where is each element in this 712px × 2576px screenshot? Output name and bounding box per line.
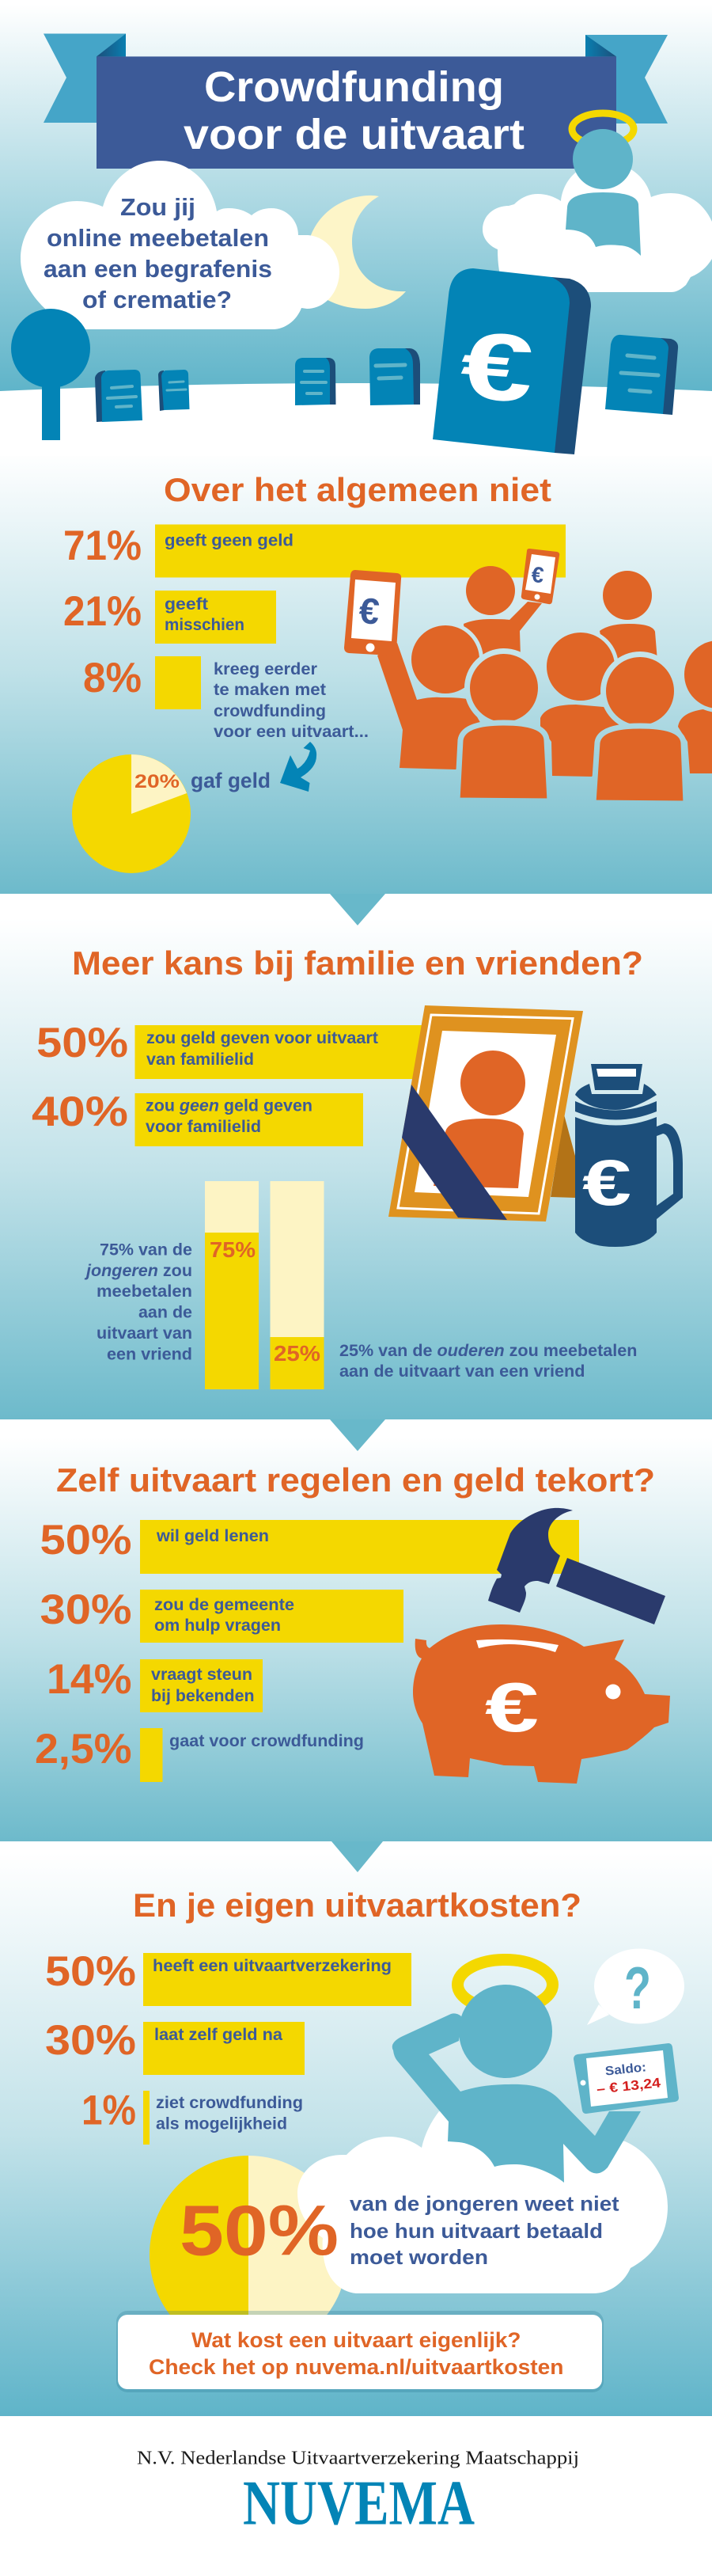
bar 50%: van familielid <box>146 1051 254 1069</box>
question text <box>44 193 272 313</box>
bar 21%: 21% <box>63 588 142 635</box>
bar 8%: voor een uitvaart... <box>214 723 369 741</box>
question text: online meebetalen <box>47 224 269 252</box>
back person right <box>600 571 657 661</box>
speech bubble <box>587 1949 684 2025</box>
text: ouderen <box>339 1342 638 1381</box>
panel: familie en vrienden <box>0 894 712 1419</box>
pointer triangle <box>331 1841 383 1872</box>
small tombstone 5 <box>605 335 678 415</box>
stacked bar: jongeren <box>205 1181 259 1389</box>
text: jongeren: jongeren zou <box>84 1262 192 1280</box>
crowd illustration <box>344 549 712 804</box>
panel: footer <box>0 2416 712 2576</box>
stacked bar: ouderen: 25% <box>274 1341 320 1366</box>
tablet with balance: – € 13,24 <box>596 2075 661 2097</box>
bar 2,5%: gaat voor crowdfunding <box>169 1732 364 1750</box>
angel figure <box>566 113 641 256</box>
bar 1%: 1% <box>81 2087 136 2134</box>
back person left with phone <box>464 566 542 657</box>
bar 40% <box>32 1089 363 1146</box>
stacked bar: ouderen <box>271 1181 324 1389</box>
logo: NUVEMA: NUVEMA <box>243 2469 475 2539</box>
bar 50% <box>36 1020 424 1079</box>
panel: over het algemeen niet <box>0 456 712 894</box>
cloud text: van de jongeren weet niet <box>350 2192 619 2216</box>
title <box>184 63 525 158</box>
call to action <box>116 2311 604 2392</box>
pointer triangle <box>330 894 385 925</box>
call to action: Wat kost een uitvaart eigenlijk? <box>191 2328 521 2352</box>
title: voor de uitvaart <box>184 111 525 158</box>
bar 40%: voor familielid <box>146 1118 261 1136</box>
collection jar with euro <box>575 1064 683 1247</box>
bar 71% <box>63 522 566 578</box>
cloud text: hoe hun uitvaart betaald <box>350 2219 603 2243</box>
company name: N.V. Nederlandse Uitvaartverzekering Maatschappij <box>137 2449 579 2469</box>
bar 50% <box>45 1948 411 2006</box>
bar 14%: 14% <box>47 1656 131 1703</box>
text: jongeren: meebetalen <box>97 1282 192 1301</box>
hammer <box>488 1508 665 1624</box>
question text: aan een begrafenis <box>44 255 272 283</box>
bar 50%: wil geld lenen <box>156 1527 269 1545</box>
bar 50% <box>40 1517 579 1574</box>
bar 8% <box>83 655 369 741</box>
pie chart 20%: 20% <box>134 771 180 792</box>
bar 30%: zou de gemeente <box>154 1596 294 1614</box>
bar 30%: 30% <box>40 1586 131 1633</box>
bar 14% <box>47 1656 263 1712</box>
portrait <box>434 1051 525 1188</box>
half circle chart <box>150 2156 342 2315</box>
pointer triangle <box>330 1419 385 1451</box>
piggy bank <box>413 1624 670 1784</box>
large phone: € <box>358 590 381 633</box>
bar 1%: als mogelijkheid <box>156 2115 287 2133</box>
front person left <box>457 651 550 801</box>
heading: Over het algemeen niet <box>164 471 551 508</box>
stacked bar: jongeren: 75% <box>210 1237 256 1262</box>
panel: header <box>0 0 712 456</box>
panel: eigen uitvaartkosten <box>0 1841 712 2416</box>
moon <box>311 196 406 309</box>
bar 30% <box>45 2017 305 2075</box>
tablet with balance <box>574 2043 679 2114</box>
heading: Meer kans bij familie en vrienden? <box>72 944 643 982</box>
small phone <box>521 549 559 604</box>
text: jongeren: uitvaart van <box>97 1324 192 1343</box>
arrow <box>280 742 316 792</box>
bar 71%: 71% <box>63 522 142 569</box>
bar 1% <box>81 2087 303 2145</box>
cloud <box>297 2111 668 2293</box>
bar 50%: zou geld geven voor uitvaart <box>146 1029 378 1047</box>
middle person right <box>540 630 629 777</box>
bar 30%: 30% <box>45 2017 136 2064</box>
bar 8%: kreeg eerder <box>214 660 317 678</box>
picture frame with portrait <box>388 1005 583 1222</box>
bar 50%: 50% <box>45 1948 136 1995</box>
large tombstone with euro: € <box>457 312 536 423</box>
bar 40%: zou geen geld geven <box>146 1097 312 1115</box>
large phone <box>344 570 401 655</box>
cloud text <box>350 2192 619 2269</box>
bar 21% <box>63 588 276 644</box>
bar 8%: crowdfunding <box>214 702 326 720</box>
bar 14%: bij bekenden <box>151 1687 255 1705</box>
small tombstone 3 <box>295 358 335 405</box>
small tombstone 1 <box>95 370 142 422</box>
bar 14%: vraagt steun <box>151 1666 252 1684</box>
small tombstone 4 <box>369 348 420 405</box>
cloud: question <box>21 161 339 329</box>
text: jongeren: aan de <box>138 1303 192 1322</box>
cloud text: moet worden <box>350 2245 488 2269</box>
piggy bank: € <box>485 1668 539 1746</box>
bar 40%: 40% <box>32 1089 128 1135</box>
bar 8%: te maken met <box>214 681 326 699</box>
middle person with phone <box>377 624 490 769</box>
heading: En je eigen uitvaartkosten? <box>133 1886 581 1924</box>
text: jongeren <box>84 1241 192 1363</box>
bar 8%: 8% <box>83 655 142 701</box>
bar 2,5%: 2,5% <box>35 1726 131 1772</box>
bar 50%: 50% <box>40 1517 131 1563</box>
small tombstone 2 <box>158 370 190 411</box>
speech bubble: ? <box>624 1955 651 2021</box>
pie chart 20% <box>72 754 191 873</box>
front person right <box>593 654 686 804</box>
title: Crowdfunding <box>204 63 504 111</box>
text: jongeren: een vriend <box>107 1346 192 1363</box>
bar 71%: geeft geen geld <box>165 532 294 549</box>
text: jongeren: 75% van de <box>100 1241 192 1259</box>
bar 21%: geeft <box>165 595 208 614</box>
question text: Zou jij <box>120 193 195 221</box>
label: gaf geld: gaf geld <box>191 769 271 792</box>
bar 30%: om hulp vragen <box>154 1617 281 1635</box>
bar 30%: laat zelf geld na <box>154 2026 282 2044</box>
small phone: € <box>530 562 545 587</box>
heading: Zelf uitvaart regelen en geld tekort? <box>56 1461 655 1499</box>
large tombstone with euro <box>433 268 591 454</box>
bar 30% <box>40 1586 403 1643</box>
far-right person <box>678 638 712 773</box>
bar 50%: heeft een uitvaartverzekering <box>153 1957 392 1975</box>
bar 2,5% <box>35 1726 364 1782</box>
ribbon banner <box>44 33 668 169</box>
collection jar with euro: € <box>582 1147 631 1219</box>
tablet with balance: Saldo: <box>604 2061 647 2079</box>
text: ouderen: 25% van de ouderen zou meebetalen <box>339 1342 638 1360</box>
cloud: angel <box>483 162 712 292</box>
call to action: Check het op nuvema.nl/uitvaartkosten <box>149 2355 563 2379</box>
text: ouderen: aan de uitvaart van een vriend <box>339 1362 585 1381</box>
bar 21%: misschien <box>165 616 244 634</box>
tree <box>11 309 90 440</box>
question text: of crematie? <box>82 286 232 313</box>
mourning sash <box>402 1085 507 1220</box>
bar 50%: 50% <box>36 1020 128 1066</box>
bar 1%: ziet crowdfunding <box>156 2094 303 2112</box>
big 50%: 50% <box>180 2192 339 2271</box>
panel: zelf uitvaart regelen <box>0 1419 712 1841</box>
angel thinking figure <box>392 1960 641 2183</box>
